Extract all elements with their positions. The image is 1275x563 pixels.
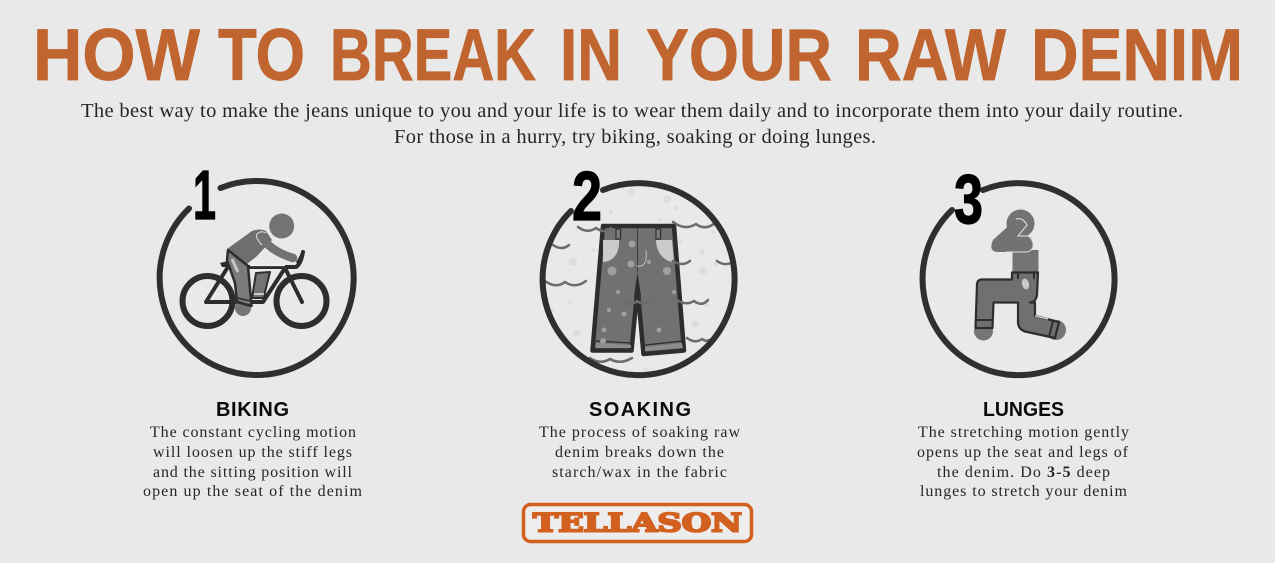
description: lunges: the denim. Do 3-5 deep xyxy=(937,464,1110,481)
description: lunges xyxy=(917,424,1129,500)
description: soaking xyxy=(539,424,740,481)
icon: jeans xyxy=(592,226,684,354)
description: lunges: The stretching motion gently xyxy=(918,424,1129,441)
description: soaking: The process of soaking raw xyxy=(539,424,740,441)
icon: lunging figure xyxy=(974,210,1066,340)
title: DENIM xyxy=(1031,15,1243,96)
icon: water waves xyxy=(545,222,731,362)
panel: soaking xyxy=(539,157,740,481)
number 2: 2 xyxy=(572,157,602,235)
panel: lunges xyxy=(917,160,1129,500)
logo: Tellason xyxy=(524,504,752,542)
title: BREAK xyxy=(330,15,536,96)
description: biking: and the sitting position will xyxy=(153,464,353,481)
heading: soaking: SOAKING xyxy=(589,399,691,421)
description: biking xyxy=(143,424,363,500)
intro text xyxy=(81,100,1183,148)
title: HOW xyxy=(33,15,200,96)
intro text: The best way to make the jeans unique to you and your life is to wear them daily and to incorporate them into your daily routine. xyxy=(81,100,1183,122)
intro text: For those in a hurry, try biking, soaking or doing lunges. xyxy=(394,126,876,148)
description: soaking: denim breaks down the xyxy=(555,444,724,461)
icon: cyclist xyxy=(182,214,326,326)
description: biking: will loosen up the stiff legs xyxy=(153,444,352,461)
description: biking: open up the seat of the denim xyxy=(143,483,363,500)
description: soaking: starch/wax in the fabric xyxy=(552,464,727,481)
icon: faint bubbles xyxy=(552,188,718,371)
title: YOUR xyxy=(646,15,832,96)
description: lunges: lunges to stretch your denim xyxy=(920,483,1128,500)
description: lunges: opens up the seat and legs of xyxy=(917,444,1129,461)
icon: lunges circle xyxy=(923,183,1115,375)
logo: Tellason: TELLASON xyxy=(533,508,742,538)
title xyxy=(33,15,1243,96)
title: TO xyxy=(218,15,305,96)
panel: biking xyxy=(143,156,363,500)
title: RAW xyxy=(855,15,1006,96)
heading: lunges: LUNGES xyxy=(983,399,1064,421)
title: IN xyxy=(560,15,622,96)
icon: soaking circle xyxy=(543,183,735,375)
number 3: 3 xyxy=(954,160,983,238)
number 1: 1 xyxy=(193,156,216,234)
description: biking: The constant cycling motion xyxy=(150,424,356,441)
heading: biking: BIKING xyxy=(216,399,289,421)
icon: biking circle xyxy=(160,181,354,375)
